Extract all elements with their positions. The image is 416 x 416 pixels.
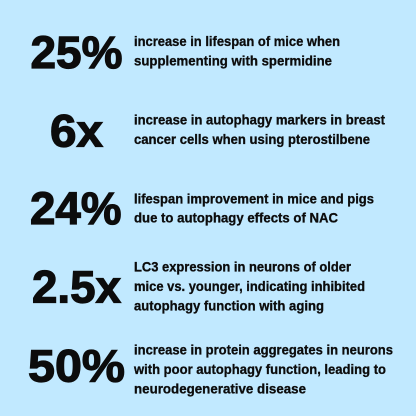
- description: NAC: due to autophagy effects of NAC: [134, 210, 338, 226]
- big number: 6x: 6x: [50, 106, 103, 156]
- description: LC3 expression: LC3 expression in neurons of older: [134, 260, 352, 274]
- description: LC3 expression: [134, 260, 365, 314]
- description: LC3 expression: mice vs. younger, indicating inhibited: [134, 279, 365, 294]
- description: protein aggregates: neurodegenerative disease: [134, 382, 306, 397]
- description: protein aggregates: [133, 343, 393, 397]
- big number: 2.5x: 2.5x: [32, 262, 121, 312]
- description: pterostilbene: cancer cells when using pterostilbene: [134, 132, 370, 147]
- stat row: 2.5x LC3 expression: [32, 260, 365, 314]
- stat row: 50% protein aggregates: [28, 340, 393, 397]
- description: spermidine: supplementing with spermidine: [134, 54, 332, 69]
- stat row: 24% lifespan improvement: [30, 183, 374, 234]
- description: protein aggregates: with poor autophagy function, leading to: [133, 362, 386, 377]
- stat row: 25% lifespan: [30, 27, 340, 78]
- description: NAC: [134, 192, 374, 226]
- big number: 50%: 50%: [28, 340, 125, 392]
- big number: 24%: 24%: [30, 183, 122, 234]
- description: spermidine: increase in lifespan of mice when: [134, 34, 340, 49]
- big number: 25%: 25%: [30, 27, 122, 78]
- description: LC3 expression: autophagy function with aging: [134, 299, 324, 314]
- description: spermidine: [134, 34, 340, 69]
- description: protein aggregates: increase in protein aggregates in neurons: [134, 343, 393, 358]
- description: NAC: lifespan improvement in mice and pigs: [134, 192, 374, 206]
- stat row: 6x autophagy markers: [50, 106, 385, 156]
- description: pterostilbene: increase in autophagy markers in breast: [134, 112, 385, 128]
- description: pterostilbene: [134, 112, 385, 147]
